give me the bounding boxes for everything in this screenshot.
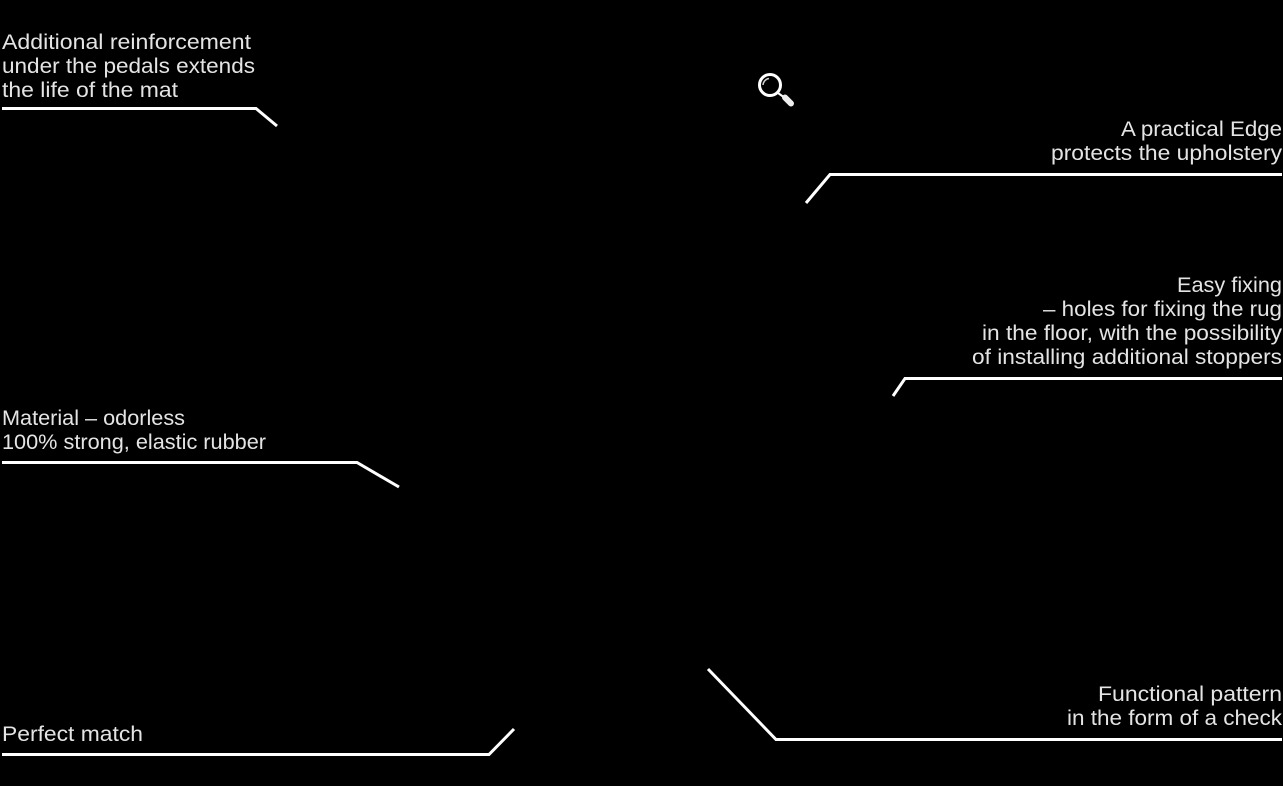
callout: easy fixing: in the floor, with the possibility: [982, 322, 1283, 345]
callout: pedal reinforcement: the life of the mat: [2, 79, 178, 102]
callout: easy fixing: of installing additional stoppers: [972, 346, 1282, 369]
callout: practical edge: protects the upholstery: [1051, 142, 1283, 165]
callout: pedal reinforcement: Additional reinforcement: [2, 31, 251, 54]
callout: practical edge: A practical Edge: [1121, 118, 1282, 141]
callout: practical edge: [806, 118, 1283, 203]
callout: functional pattern: Functional pattern: [1098, 683, 1282, 706]
callout: material: Material – odorless: [2, 407, 185, 430]
callout: functional pattern: [708, 669, 1283, 740]
callout: material: [2, 407, 399, 487]
callout: easy fixing: [893, 274, 1283, 396]
callout: perfect match: Perfect match: [2, 723, 143, 746]
icon: magnifying glass: [760, 74, 791, 104]
callout: easy fixing: Easy fixing: [1177, 274, 1282, 297]
callout: easy fixing: – holes for fixing the rug: [1043, 298, 1282, 321]
callout: pedal reinforcement: [2, 31, 277, 126]
callout: material: 100% strong, elastic rubber: [2, 431, 266, 454]
callout: functional pattern: in the form of a check: [1067, 707, 1283, 730]
callout: perfect match: [2, 723, 514, 754]
callout: pedal reinforcement: under the pedals extends: [2, 55, 255, 78]
